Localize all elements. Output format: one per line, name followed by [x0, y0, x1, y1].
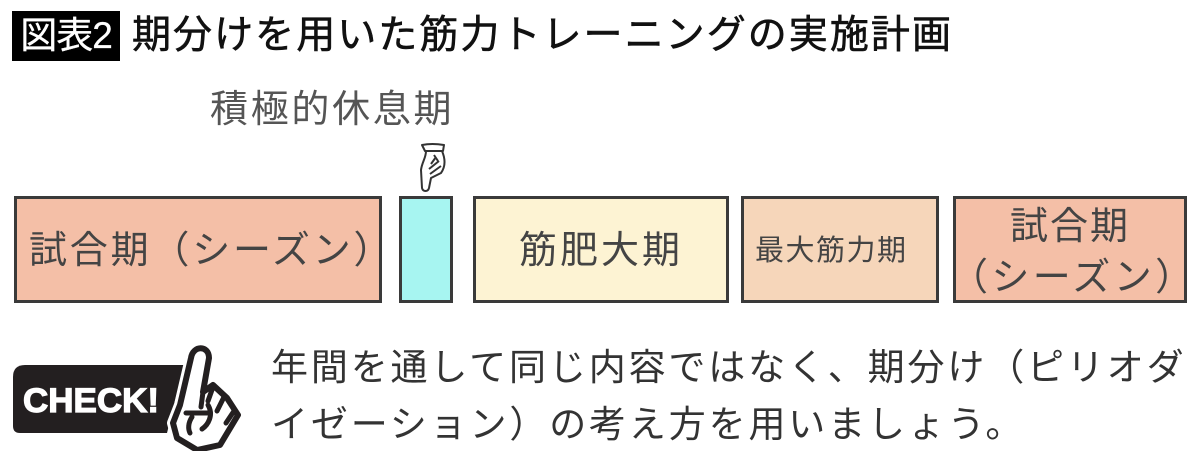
text: in-season 2 line 2: （シーズン）	[950, 257, 1197, 299]
text: in-season 2 line 1: 試合期	[1010, 206, 1130, 248]
box: in-season 2	[953, 196, 1187, 303]
title: 期分けを用いた筋力トレーニングの実施計画	[132, 14, 953, 57]
text: hypertrophy: 筋肥大期	[519, 230, 683, 272]
label: active rest period: 積極的休息期	[210, 89, 454, 131]
message line 1: 年間を通して同じ内容ではなく、期分け（ピリオダ	[271, 347, 1186, 388]
check badge: CHECK!	[23, 382, 159, 420]
box: active rest	[399, 196, 453, 303]
text: maximum strength: 最大筋力期	[755, 235, 908, 267]
box: hypertrophy	[473, 196, 729, 303]
figure tag: 図表2	[20, 15, 112, 56]
box: in-season 1	[14, 196, 382, 303]
check badge	[13, 345, 241, 451]
icon: pointing hand	[420, 143, 446, 192]
message line 2: イゼーション）の考え方を用いましょう。	[271, 404, 1025, 445]
box: maximum strength	[741, 196, 939, 303]
figure tag	[12, 11, 120, 61]
text: in-season 1: 試合期（シーズン）	[29, 230, 394, 272]
